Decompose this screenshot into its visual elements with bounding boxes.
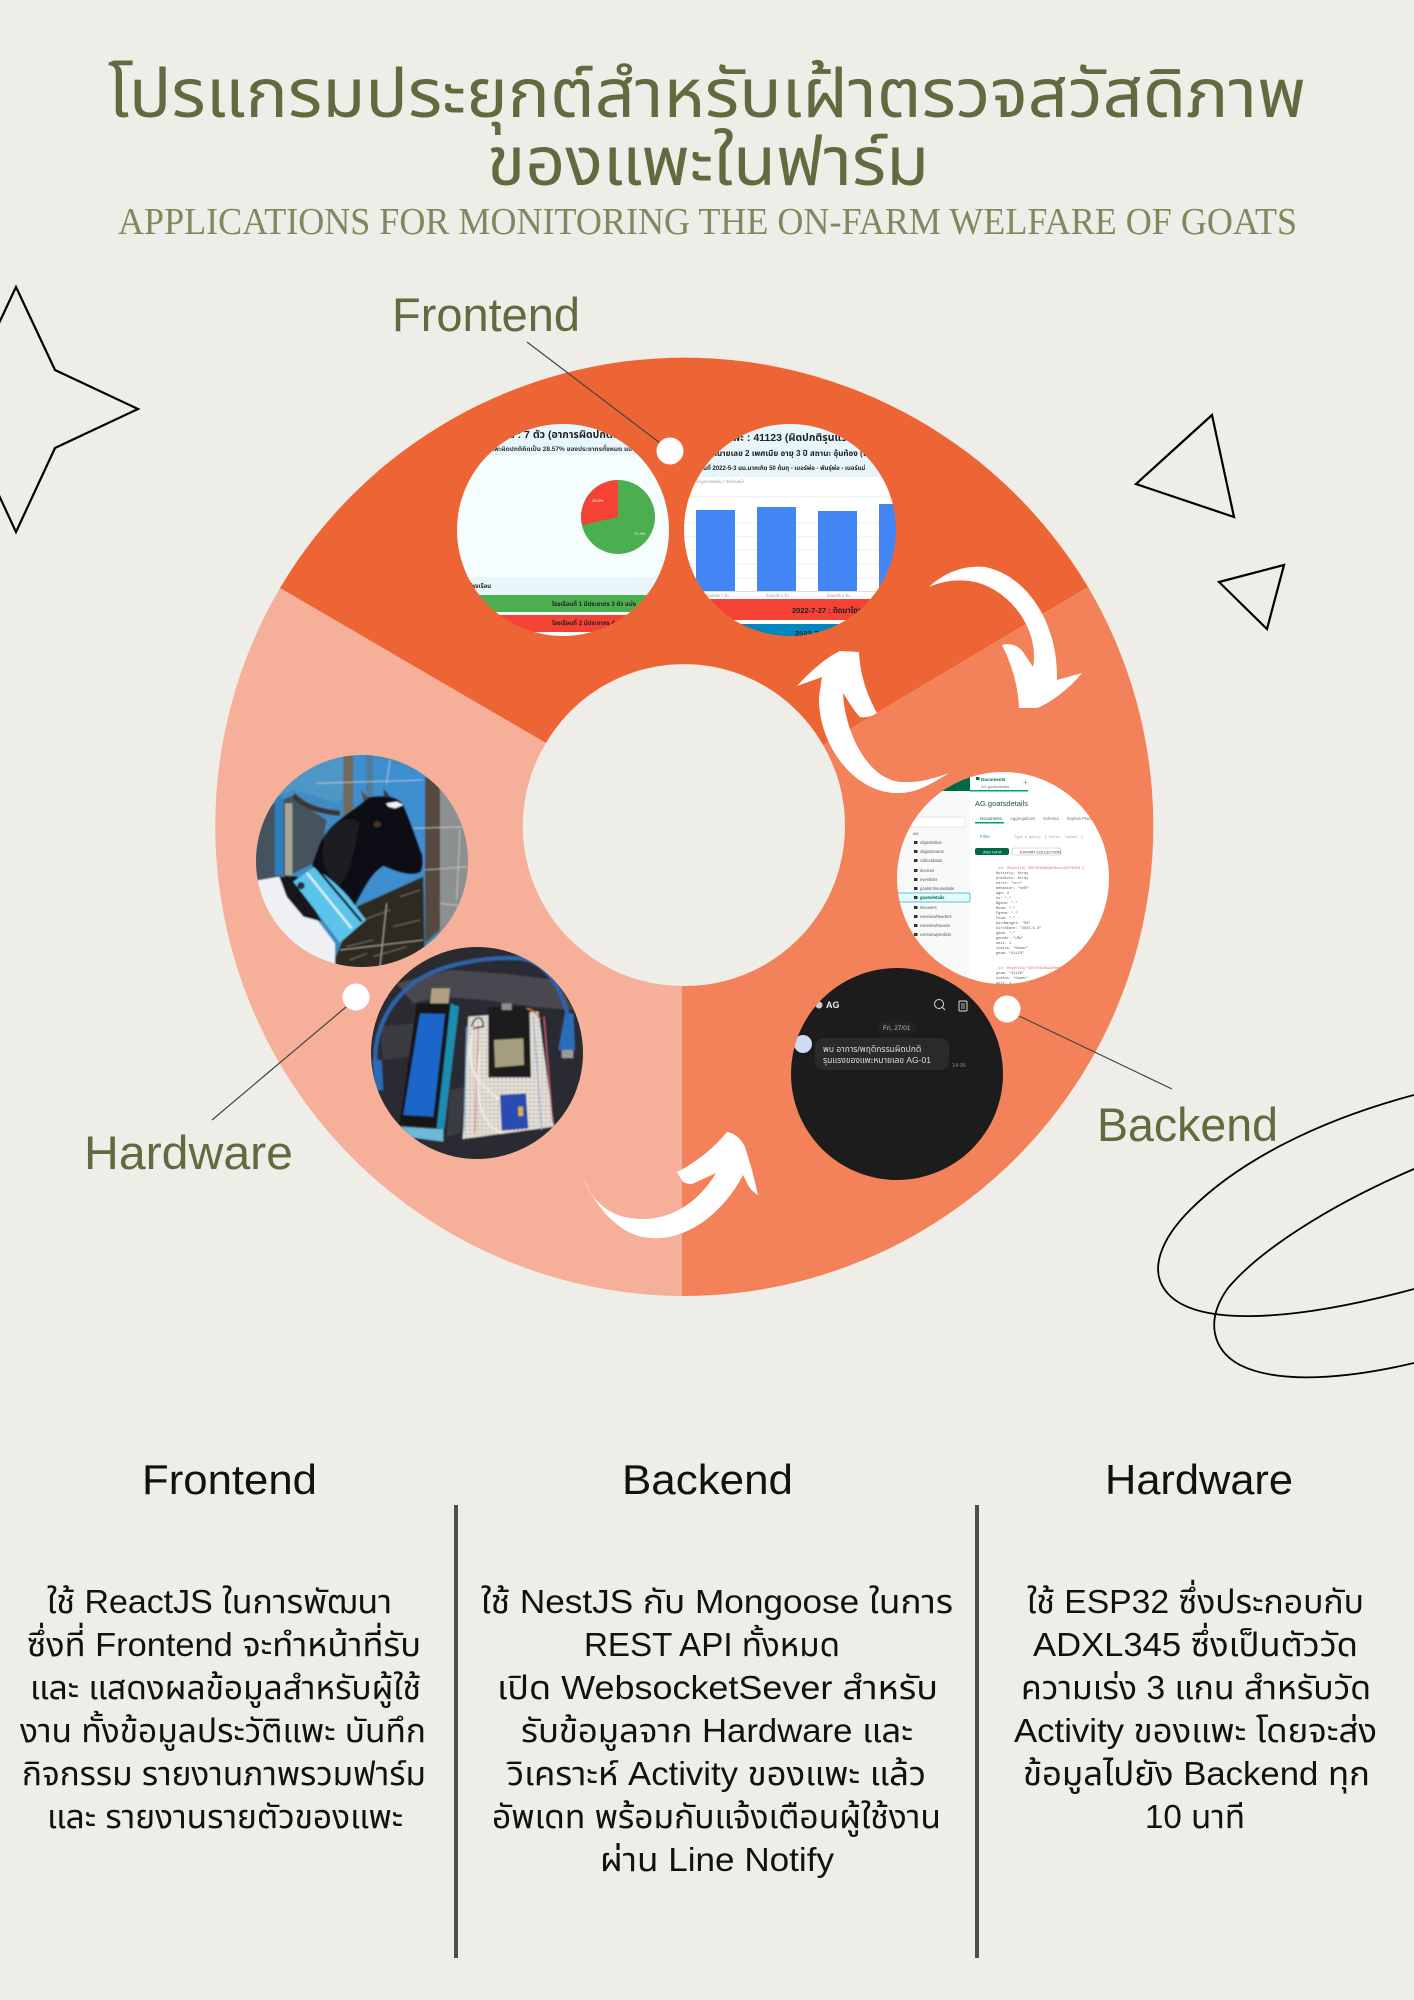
backend database screenshot: goatsInhousedatis [920, 886, 954, 891]
backend database screenshot: eventlists [920, 877, 937, 882]
backend database screenshot: unit: 1 [996, 941, 1011, 946]
text block: frontend: ใช้ ReactJS ในการพัฒนา [47, 1583, 392, 1620]
donut chart [215, 358, 1153, 1296]
text block: hardware: Activity ของแพะ โดยจะส่ง [1014, 1712, 1377, 1749]
text block: hardware [1014, 1579, 1377, 1835]
backend database screenshot: ADD DATA [983, 850, 1002, 854]
goat wearing collar photo [256, 755, 468, 967]
frontend pie chart screenshot: โรงเรือน [470, 583, 491, 590]
backend database screenshot: Fgene: "-" [996, 911, 1018, 916]
backend database screenshot: gene: "-" [996, 931, 1015, 936]
frontend bar chart screenshot: แพะ : 41123 (ผิดปกติรุนแรง) [726, 432, 856, 444]
text block: frontend [20, 1583, 426, 1835]
backend database screenshot: objactivities [920, 840, 942, 845]
backend database screenshot: overviewpredicts [920, 932, 951, 937]
callout: hardware: Hardware [84, 1126, 293, 1179]
decorative small triangle [1219, 565, 1284, 629]
backend database screenshot: lineusers [920, 905, 937, 910]
backend database screenshot: predicts: Array [996, 876, 1029, 881]
arrow: hardware to backend [583, 1132, 758, 1238]
backend database screenshot: gnum: "41123" [996, 951, 1024, 956]
frontend bar chart screenshot: วันที่ 2022-5-3 นน.มากเกิด 50 ต้นทุ - เบอร์พ่อ - พันธุ์พ่อ - เบอร์แม่ [700, 463, 865, 472]
backend database screenshot: _id: ObjectId('63f4f3d8b2af8ecc12ff34f9') [995, 966, 1084, 971]
text block: frontend: ซึ่งที่ Frontend จะทำหน้าที่รับ [27, 1622, 421, 1663]
backend database screenshot: bs: "-" [996, 896, 1011, 901]
text block: backend: รับข้อมูลจาก Hardware และ [521, 1712, 913, 1751]
backend database screenshot: AG.goatsdetails [975, 799, 1028, 808]
backend database screenshot: Fnum: "-" [996, 916, 1015, 921]
backend database screenshot: gender: "เมีย" [996, 935, 1023, 941]
backend Line Notify screenshot: 14:36 [952, 1063, 966, 1069]
text block: hardware: 10 นาที [1145, 1798, 1245, 1835]
text block: backend: ผ่าน Line Notify [600, 1841, 835, 1878]
backend database screenshot: + [1023, 778, 1028, 787]
segment: frontend [280, 358, 1088, 745]
divider left [454, 1505, 458, 1958]
text block: backend: วิเคราะห์ Activity ของแพะ แล้ว [507, 1755, 926, 1792]
backend database screenshot: Documents [980, 816, 1002, 821]
text block: backend: อัพเดท พร้อมกับแจ้งเตือนผู้ใช้งาน [492, 1798, 941, 1837]
frontend pie chart screenshot: ทั้งหมด : 7 ตัว (อาการผิดปกติในกลุ่ม) [482, 427, 646, 441]
backend database screenshot: Filter [980, 834, 991, 839]
frontend bar chart screenshot: 2022-7 [795, 629, 818, 638]
backend database screenshot: age: 3 [996, 892, 1009, 896]
frontend pie chart screenshot [450, 420, 675, 640]
backend database screenshot: gnum: "41120" [996, 971, 1024, 976]
backend database screenshot: Activity: Array [996, 871, 1029, 876]
divider right [975, 1505, 979, 1958]
frontend bar chart screenshot [684, 424, 896, 636]
arrow: backend to frontend [797, 651, 949, 793]
backend database screenshot: Type a query: { field: 'value' } [1014, 835, 1083, 840]
text block: frontend: กิจกรรม รายงานภาพรวมฟาร์ม [22, 1755, 426, 1792]
frontend bar chart screenshot: ข้อมูลของแพะใน 7 วันก่อนหน้า [696, 479, 745, 484]
frontend bar chart screenshot: ย้อนหลัง 5 วัน [827, 593, 850, 598]
frontend pie chart screenshot: 71.4% [634, 531, 646, 536]
backend database screenshot: color: "ขาว" [996, 881, 1022, 886]
text block: hardware: ใช้ ESP32 ซึ่งประกอบกับ [1027, 1579, 1364, 1620]
backend database screenshot [890, 770, 1115, 990]
backend database screenshot: unit: 1 [996, 981, 1011, 986]
segment: backend [682, 587, 1153, 1296]
backend database screenshot: Bnum: "-" [996, 906, 1015, 911]
backend Line Notify screenshot: พบ อาการ/พฤติกรรมผิดปกติ [823, 1044, 921, 1054]
backend database screenshot: behavior: "ปกติ" [996, 886, 1029, 891]
text block: frontend: และ แสดงผลข้อมูลสำหรับผู้ใช้ [30, 1669, 421, 1708]
heading: hardware: Hardware [1105, 1456, 1293, 1503]
frontend pie chart screenshot: โรงเรือนที่ 2 มีประชากร 4 [552, 618, 615, 627]
backend database screenshot: status: "Owner" [996, 946, 1028, 951]
backend database screenshot: _id: ObjectId('63f4f3d8b2af8ecc12ff34f8') [995, 866, 1084, 871]
callout: backend [994, 996, 1278, 1151]
callout: frontend [392, 288, 684, 464]
decorative large triangle [1136, 415, 1234, 517]
text block: frontend: งาน ทั้งข้อมูลประวัติแพะ บันทึก [20, 1710, 426, 1751]
backend database screenshot: status: "Owner" [996, 976, 1028, 981]
text block: backend: ใช้ NestJS กับ Mongoose ในการ [481, 1583, 953, 1620]
text block: hardware: ข้อมูลไปยัง Backend ทุก [1023, 1755, 1370, 1794]
frontend bar chart screenshot: หมายเลข 2 เพศเมีย อายุ 3 ปี สถานะ อุ้มท้อง (ไม่) [712, 447, 874, 458]
text block: frontend: และ รายงานรายตัวของแพะ [47, 1798, 403, 1835]
text block: backend: REST API ทั้งหมด [584, 1624, 840, 1663]
backend database screenshot: Bgene: "-" [996, 901, 1018, 906]
frontend bar chart screenshot: 2022-7-27 : ติดมาโดย [792, 606, 863, 615]
backend database screenshot: overviewhouses [920, 923, 950, 928]
title: ของแพะในฟาร์ม [487, 124, 929, 200]
hardware board photo [367, 943, 587, 1163]
subtitle: APPLICATIONS FOR MONITORING THE ON-FARM WELFARE OF GOATS [118, 201, 1297, 243]
callout: hardware [84, 984, 370, 1179]
frontend bar chart screenshot: ย้อนหลัง 7 วัน [706, 593, 729, 598]
backend database screenshot: Documents [981, 777, 1006, 782]
frontend bar chart screenshot: ย้อนหลัง 6 วัน [766, 593, 789, 598]
text block: hardware: ความเร่ง 3 แกน สำหรับวัด [1021, 1669, 1371, 1706]
heading: frontend: Frontend [142, 1456, 317, 1503]
backend database screenshot: bornWeight: "50" [996, 921, 1031, 926]
backend database screenshot: goatsdetails [920, 895, 945, 900]
title: โปรแกรมประยุกต์สำหรับเฝ้าตรวจสวัสดิภาพ [108, 56, 1306, 135]
decorative ellipses [1158, 1095, 1414, 1377]
segment: hardware [215, 588, 682, 1296]
frontend pie chart screenshot: โรงเรือนที่ 1 มีประชากร 3 ตัว แบ่ง [552, 599, 637, 608]
backend database screenshot: birthDate: "2022-5-3" [996, 926, 1041, 931]
text block: backend [481, 1583, 953, 1878]
backend database screenshot: AG [913, 831, 919, 836]
backend database screenshot: Explain Plan [1067, 816, 1091, 821]
heading: backend: Backend [622, 1456, 793, 1503]
backend Line Notify screenshot [791, 968, 1003, 1180]
backend Line Notify screenshot: Fri, 27/01 [883, 1025, 911, 1032]
backend database screenshot: collectdatas [920, 858, 942, 863]
backend database screenshot: overviewheaders [920, 914, 952, 919]
callout: backend: Backend [1097, 1098, 1278, 1151]
frontend pie chart screenshot: 28.6% [592, 498, 604, 503]
title [108, 56, 1306, 200]
decorative star [0, 287, 138, 532]
backend Line Notify screenshot: รุนแรงของแพะหมายเลข AG-01 [823, 1055, 931, 1065]
callout: frontend: Frontend [392, 288, 580, 341]
backend database screenshot: objpostnams [920, 849, 944, 854]
frontend pie chart screenshot: แพะผิดปกติคิดเป็น 28.57% ของประชากรทั้งหมด แบ่งโดย [490, 444, 646, 453]
arrow: frontend to backend [929, 567, 1082, 708]
backend database screenshot: Aggregations [1010, 816, 1035, 821]
backend database screenshot: AG.goatsdetails [981, 784, 1009, 789]
text block: hardware: ADXL345 ซึ่งเป็นตัววัด [1033, 1622, 1358, 1663]
backend database screenshot: EXPORT COLLECTION [1020, 850, 1061, 854]
backend database screenshot: Schema [1043, 816, 1059, 821]
backend Line Notify screenshot: AG [826, 1000, 840, 1010]
backend database screenshot: devices [920, 868, 934, 873]
text block: backend: เปิด WebsocketSever สำหรับ [497, 1669, 938, 1706]
